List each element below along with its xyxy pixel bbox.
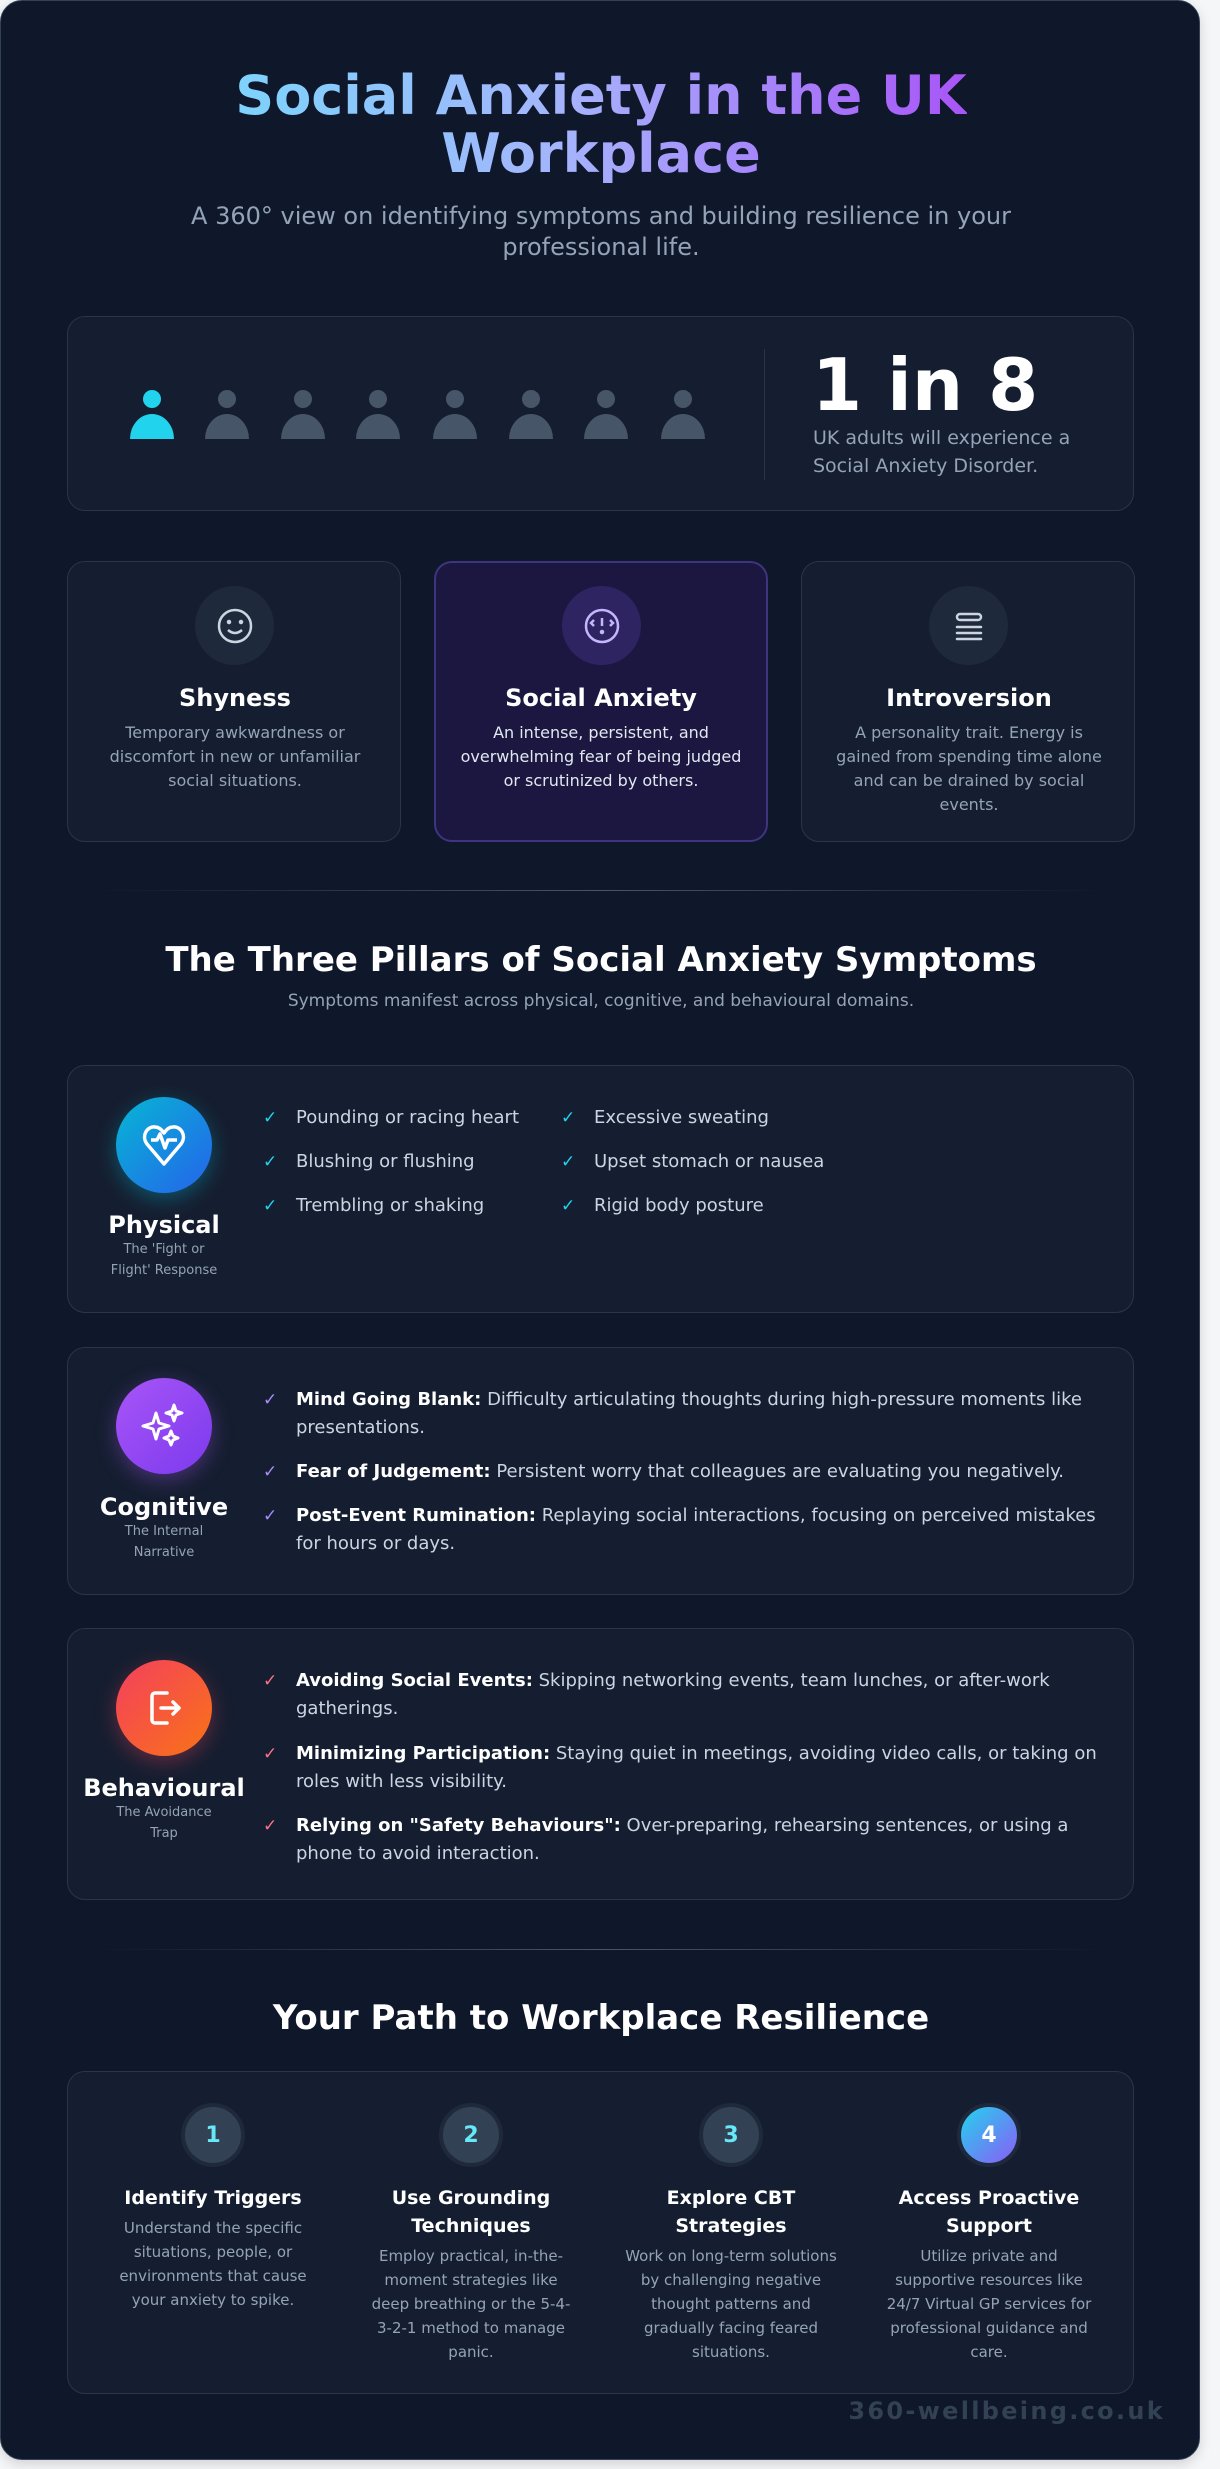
panel: physical: Blushing or flushing — [296, 1151, 475, 1172]
panel: cognitive: The Internal Narrative — [125, 1524, 203, 1560]
panel: behavioural: Avoiding Social Events: Skipping networking events, team lunches, or after-work gatherings. — [296, 1670, 1050, 1719]
title: Workplace — [441, 122, 761, 185]
icon: exit door — [116, 1660, 212, 1756]
heading: Shyness — [179, 684, 291, 712]
step 2: 2 — [463, 2122, 479, 2148]
symptom list — [263, 1670, 1050, 1719]
panel: cognitive: Post-Event Rumination: Replaying social interactions, focusing on perceived mistakes for hours or days. — [296, 1505, 1096, 1554]
panel: steps — [67, 2071, 1134, 2394]
subtitle: A 360° view on identifying symptoms and building resilience in your professional life. — [191, 202, 1011, 261]
panel: physical: Excessive sweating — [594, 1107, 769, 1128]
heading: Social Anxiety — [505, 684, 697, 712]
panel: behavioural: ✓ — [263, 1671, 277, 1691]
label: Behavioural — [83, 1774, 245, 1802]
panel: behavioural — [67, 1628, 1134, 1900]
panel: physical — [67, 1065, 1134, 1313]
icon: sparkles — [116, 1378, 212, 1474]
panel: physical: ✓ — [263, 1108, 277, 1128]
panel: introversion — [801, 561, 1135, 842]
panel: cognitive: Mind Going Blank: Difficulty articulating thoughts during high-pressure moments like presentations. — [296, 1389, 1082, 1438]
panel: cognitive: ✓ — [263, 1390, 277, 1410]
heading: Introversion — [886, 684, 1052, 712]
step 1: Understand the specific situations, people, or environments that cause your anxiety to spike. — [119, 2219, 307, 2309]
step 4 — [887, 2103, 1092, 2361]
step 1: Identify Triggers — [124, 2187, 302, 2209]
label: Physical — [108, 1211, 220, 1239]
step 4: Utilize private and supportive resources like 24/7 Virtual GP services for professional guidance and care. — [887, 2247, 1091, 2361]
panel: physical: ✓ — [263, 1196, 277, 1216]
icon: heart — [116, 1097, 212, 1193]
panel: physical: The 'Fight or Flight' Response — [111, 1242, 217, 1278]
step 3: Explore CBT Strategies — [667, 2187, 795, 2237]
icon row: 8 people, 1 highlighted — [130, 390, 705, 439]
step 2: Employ practical, in-the-moment strategies like deep breathing or the 5-4-3-2-1 method to manage panic. — [372, 2247, 570, 2361]
icon: anxious face — [562, 586, 641, 665]
panel: physical: Upset stomach or nausea — [594, 1151, 824, 1172]
step 3: Work on long-term solutions by challenging negative thought patterns and gradually facing feared situations. — [625, 2247, 837, 2361]
description: Temporary awkwardness or discomfort in new or unfamiliar social situations. — [110, 723, 360, 790]
step 1: 1 — [205, 2122, 221, 2148]
panel: physical: ✓ — [561, 1108, 575, 1128]
panel: cognitive: ✓ — [263, 1462, 277, 1482]
panel: physical: Rigid body posture — [594, 1195, 764, 1216]
stat caption: UK adults will experience a Social Anxiety Disorder. — [813, 427, 1070, 477]
panel: physical: ✓ — [263, 1152, 277, 1172]
icon: smiley — [195, 586, 274, 665]
step 1 — [119, 2103, 307, 2309]
label: Cognitive — [100, 1493, 228, 1521]
big stat: 1 in 8 — [812, 343, 1038, 427]
panel: cognitive — [67, 1347, 1134, 1595]
step 4: Access Proactive Support — [899, 2187, 1079, 2237]
panel: 1 in 8 statistic — [67, 316, 1134, 511]
step 4: 4 — [981, 2122, 997, 2148]
icon: stack lines — [929, 586, 1008, 665]
panel: shyness — [67, 561, 401, 842]
step 3 — [625, 2103, 837, 2361]
step 2: Use Grounding Techniques — [392, 2187, 550, 2237]
symptom list — [263, 1389, 1082, 1438]
footer: website: 360-wellbeing.co.uk — [848, 2397, 1165, 2425]
heading: path to resilience: Your Path to Workplace Resilience — [273, 1998, 929, 2038]
description: A personality trait. Energy is gained from spending time alone and can be drained by social events. — [836, 723, 1102, 814]
panel: behavioural: Relying on "Safety Behaviours": Over-preparing, rehearsing sentences, or using a phone to avoid interaction. — [296, 1815, 1068, 1864]
title: Social Anxiety in the UK — [235, 64, 967, 127]
panel: behavioural: ✓ — [263, 1744, 277, 1764]
subheading: Symptoms manifest across physical, cognitive, and behavioural domains. — [288, 991, 914, 1011]
panel: physical: ✓ — [561, 1152, 575, 1172]
symptom list — [263, 1107, 519, 1128]
step 3: 3 — [723, 2122, 739, 2148]
panel: physical: Trembling or shaking — [296, 1195, 484, 1216]
heading: three pillars: The Three Pillars of Social Anxiety Symptoms — [165, 940, 1037, 980]
step 2 — [372, 2103, 570, 2361]
panel: cognitive: Fear of Judgement: Persistent worry that colleagues are evaluating you negatively. — [296, 1461, 1064, 1482]
panel: social anxiety — [434, 561, 768, 842]
panel: cognitive: ✓ — [263, 1506, 277, 1526]
panel: behavioural: The Avoidance Trap — [116, 1805, 212, 1841]
title — [235, 64, 967, 185]
panel: physical: Pounding or racing heart — [296, 1107, 519, 1128]
panel: behavioural: ✓ — [263, 1816, 277, 1836]
panel: behavioural: Minimizing Participation: Staying quiet in meetings, avoiding video calls, or taking on roles with less visibility. — [296, 1743, 1097, 1792]
panel: physical: ✓ — [561, 1196, 575, 1216]
description: An intense, persistent, and overwhelming fear of being judged or scrutinized by others. — [461, 723, 741, 790]
